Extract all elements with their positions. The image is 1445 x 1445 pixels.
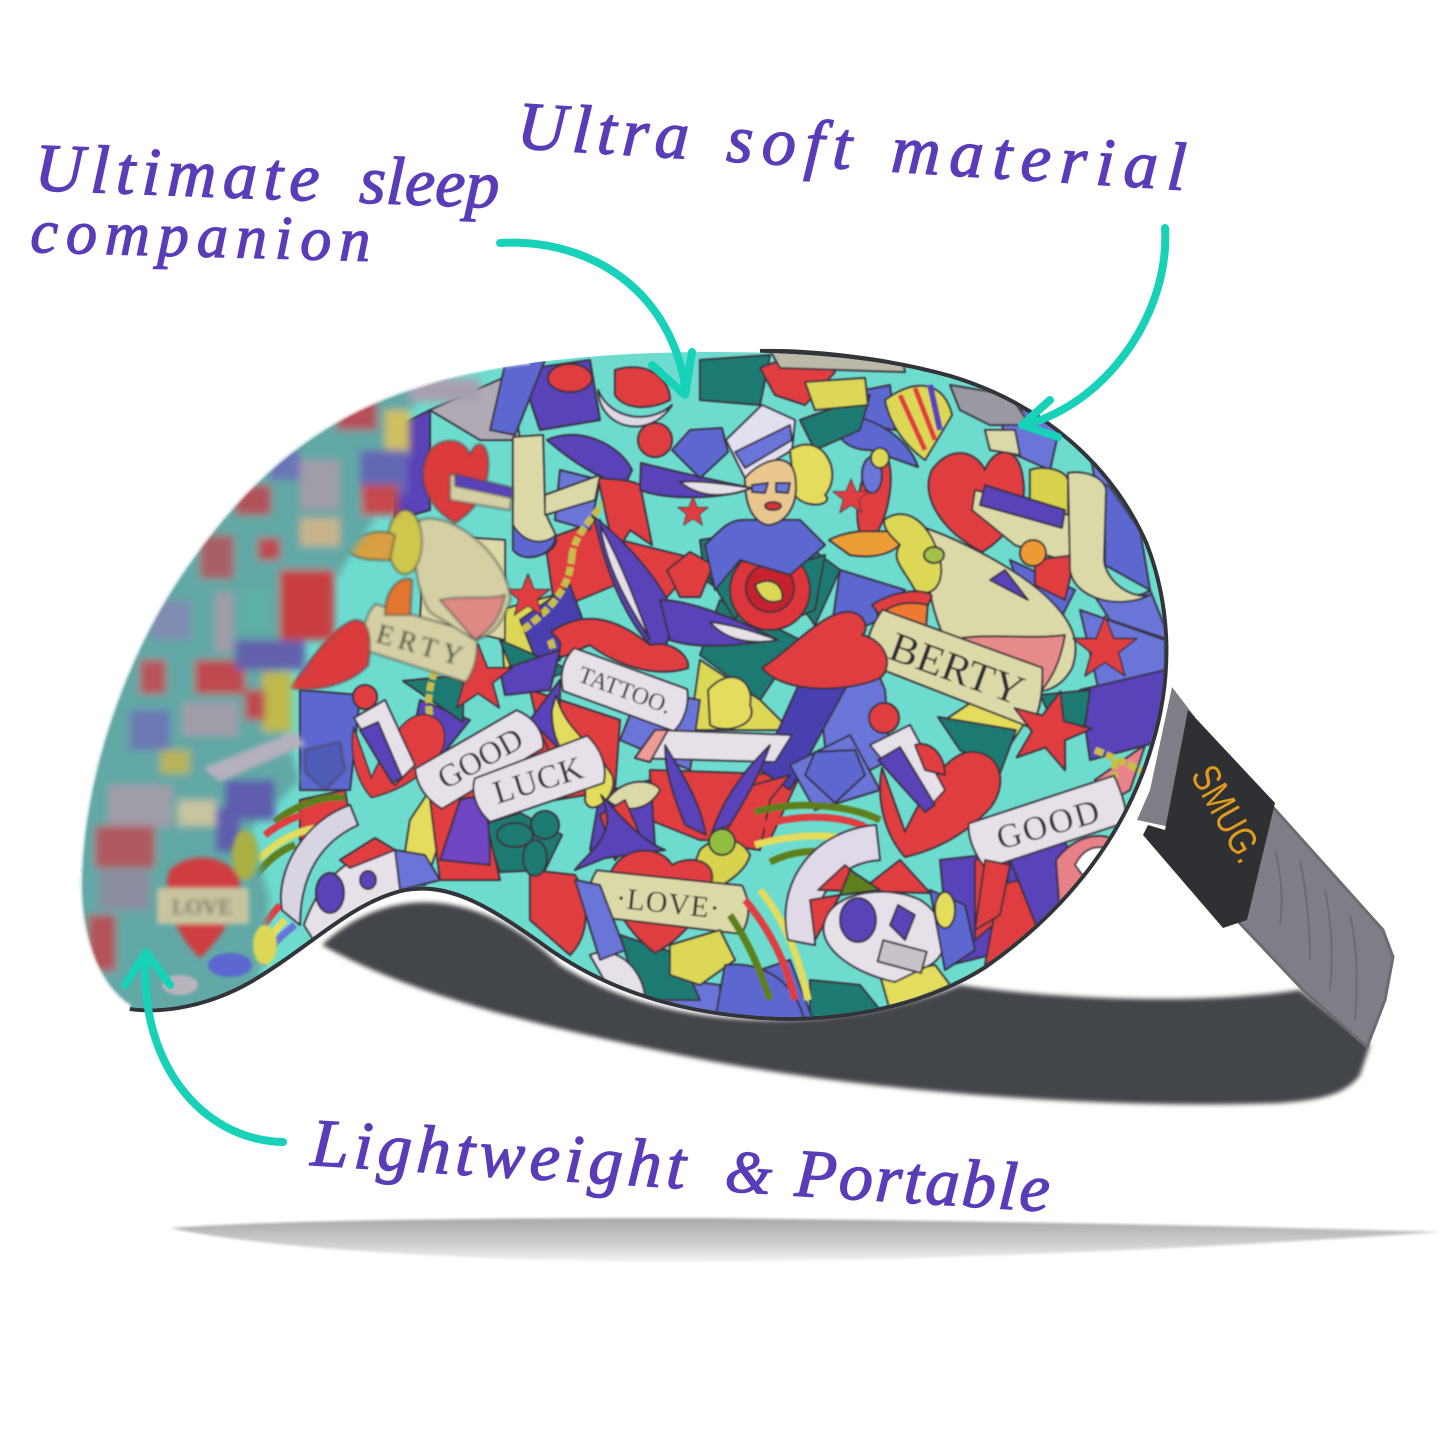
left hand shape <box>415 519 510 640</box>
word ultimate: Ultimate <box>33 129 321 216</box>
headline: ultimate sleep companion <box>30 129 501 275</box>
left big heart <box>290 620 370 689</box>
diamond <box>672 428 728 478</box>
gold knot <box>708 677 752 729</box>
gold scroll under tattoo <box>552 695 613 807</box>
lower florals <box>530 870 805 1025</box>
word material: material <box>889 111 1189 205</box>
banner text: LOVE <box>172 894 232 919</box>
rose <box>665 550 827 632</box>
soft left artwork <box>290 441 512 790</box>
mask border <box>130 353 1164 1017</box>
curved blade left <box>281 805 358 925</box>
star left <box>506 574 550 615</box>
blurred diamond <box>305 742 345 790</box>
red oval and small star <box>832 446 893 532</box>
eye mask <box>60 340 1180 1040</box>
mask pattern <box>60 340 1180 1040</box>
streamer under good banner <box>975 860 1010 930</box>
skull right <box>824 890 975 982</box>
curved blade right <box>786 825 880 945</box>
lower left love heart <box>157 830 258 958</box>
grey blade blurred <box>203 731 305 782</box>
red stars <box>456 642 514 710</box>
ampersand: & <box>723 1138 774 1207</box>
rainbow wing left <box>235 797 345 985</box>
good banner right <box>964 775 1131 915</box>
line two: companion <box>30 198 371 275</box>
luck text: LUCK <box>489 750 588 812</box>
big centre heart <box>762 612 887 688</box>
orange petal left <box>385 579 412 615</box>
ground shadow <box>170 1218 1440 1262</box>
love heart and bird <box>611 829 750 953</box>
small star near face <box>678 497 708 525</box>
flame left <box>345 532 395 560</box>
rainbow wing right <box>730 805 880 1000</box>
centre card <box>600 730 792 860</box>
arrow to top of mask <box>500 243 692 395</box>
arrow to lower left of mask <box>125 952 283 1142</box>
star far right <box>1073 616 1137 676</box>
banner text: BERTY <box>883 624 1030 715</box>
sharp artwork <box>235 350 1170 1025</box>
lower left heart <box>352 685 549 880</box>
word lightweight: Lightweight <box>308 1104 690 1204</box>
left liberty banner <box>357 603 483 683</box>
tattoo banner <box>555 647 693 733</box>
brand text: SMUG. <box>1182 758 1271 870</box>
banner text: TATTOO. <box>575 662 675 720</box>
strap label <box>1143 710 1275 928</box>
upper swallow <box>547 423 752 555</box>
banner text: ERTY <box>373 618 466 672</box>
headline: lightweight and portable <box>308 1104 1052 1226</box>
upper heart with dagger <box>929 452 1080 600</box>
dark green leaves <box>403 395 1090 1000</box>
right scroll <box>1068 472 1150 602</box>
liberty banner right <box>859 608 1053 728</box>
sailor woman <box>705 405 832 590</box>
filler shapes filling gaps <box>300 355 1165 1025</box>
eagle head left <box>388 510 422 574</box>
banner text: GOOD <box>993 793 1104 857</box>
top edge ornaments <box>548 350 1030 460</box>
bottom left details <box>162 925 277 995</box>
swallow over love heart <box>575 745 770 870</box>
good luck banners <box>411 705 610 824</box>
lower swallow <box>500 517 778 695</box>
word portable: Portable <box>792 1135 1052 1226</box>
clover <box>497 811 559 876</box>
love banner <box>586 870 751 934</box>
gold ropes <box>424 500 1143 780</box>
word sleep: sleep <box>358 142 501 223</box>
line one <box>33 129 501 223</box>
headline: ultra soft material <box>515 87 1189 205</box>
star lower right <box>1012 689 1094 772</box>
back strap <box>322 902 1370 1104</box>
eagle hand <box>884 514 1076 692</box>
harlequin triangles <box>810 860 930 940</box>
front strap <box>1137 687 1393 1047</box>
flame <box>829 530 906 556</box>
soft left edge <box>80 362 530 1007</box>
blurred far left pattern <box>60 340 480 1040</box>
periwinkle and purple background shapes <box>433 360 1170 1025</box>
banner text: ·LOVE· <box>614 882 721 925</box>
left upper heart <box>423 441 488 523</box>
word soft: soft <box>725 100 856 184</box>
orange petal <box>874 603 930 626</box>
skull left <box>304 838 440 950</box>
left scroll near swallow <box>513 435 600 557</box>
heart with dagger lower right <box>869 703 1000 857</box>
arrow to top right of mask <box>1022 228 1165 437</box>
diamond lower <box>805 750 865 803</box>
good text: GOOD <box>431 720 529 796</box>
word ultra: Ultra <box>515 87 691 174</box>
